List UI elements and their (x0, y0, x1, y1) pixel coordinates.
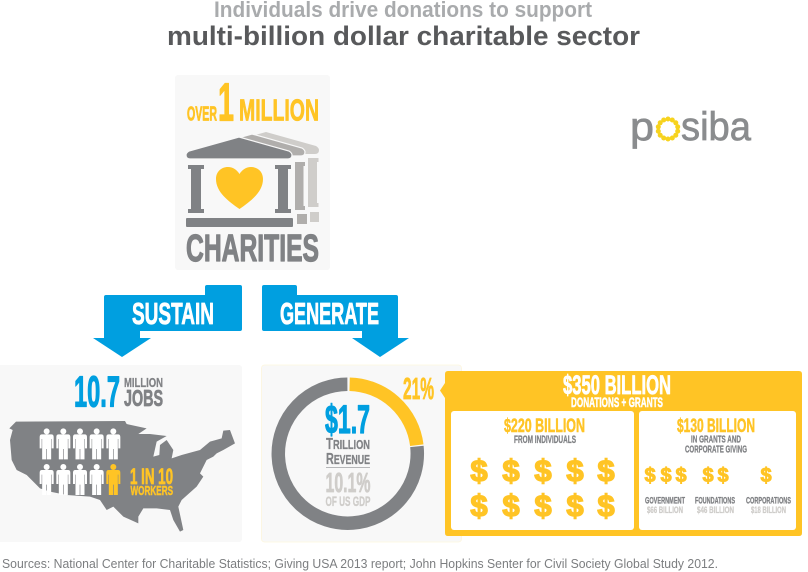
icon: ten dollar signs: $ (502, 453, 520, 488)
labels: giving sources: $66 BILLION (647, 505, 683, 515)
heading: over 1 million: OVER (187, 104, 217, 126)
icon: ten dollar signs: $ (566, 453, 584, 488)
card: from individuals: $220 BILLION (504, 416, 585, 437)
labels: giving sources: $18 BILLION (751, 505, 786, 515)
labels: giving sources (645, 496, 791, 515)
icon: ten dollar signs: $ (597, 453, 615, 488)
card: from individuals: FROM INDIVIDUALS (514, 434, 576, 446)
label: 10.1 percent of US GDP: 10.1% (326, 467, 371, 498)
heading: 10.7 million jobs: 10.7 (74, 368, 120, 416)
icon: small dollar signs: $ (702, 465, 714, 487)
card: grants and corporate giving: CORPORATE GIVING (685, 444, 747, 456)
icon: small dollar signs (644, 465, 772, 487)
icon: ten dollar signs: $ (470, 453, 488, 488)
card: grants and corporate giving: $130 BILLION (677, 416, 755, 437)
icon: small dollar signs: $ (675, 465, 687, 487)
panel: charities (175, 72, 330, 270)
icon: small dollar signs: $ (717, 465, 729, 487)
label: 1.7 trillion revenue: TRILLION (326, 436, 370, 453)
panel: jobs (0, 365, 242, 542)
label: 1.7 trillion revenue: REVENUE (326, 451, 370, 468)
arrow: generate: GENERATE (280, 297, 379, 331)
heading: over 1 million: 1 (218, 72, 234, 132)
arrow: sustain: SUSTAIN (132, 297, 214, 331)
icon: ten workers (40, 428, 120, 495)
icon: ten dollar signs: $ (597, 488, 615, 523)
panel: revenue (262, 365, 462, 542)
sources: Sources: National Center for Charitable Statistics; Giving USA 2013 report; John Hopkins Senter for Civil Society Global Study 2012. (2, 557, 718, 571)
icon: ten dollar signs: $ (534, 453, 552, 488)
panel: 350 billion donations and grants (440, 370, 802, 536)
icon: ten dollar signs: $ (470, 488, 488, 523)
label: 1 in 10 workers (130, 464, 173, 498)
card: grants and corporate giving (639, 411, 796, 530)
label: 10.1 percent of US GDP (326, 467, 371, 509)
heading: 10.7 million jobs: JOBS (124, 385, 163, 411)
heading: 350 billion: $350 BILLION (563, 370, 671, 400)
card: from individuals (451, 411, 634, 530)
arrow: sustain (93, 285, 242, 357)
title: multi-billion dollar charitable sector (167, 21, 641, 51)
label: 1 in 10 workers: 1 IN 10 (130, 464, 173, 489)
icon: ten dollar signs: $ (502, 488, 520, 523)
icon: ten dollar signs: $ (534, 488, 552, 523)
icon: small dollar signs: $ (760, 465, 772, 487)
labels: giving sources: GOVERNMENT (645, 496, 685, 506)
logo: posiba (630, 105, 752, 149)
icon: small dollar signs: $ (660, 465, 672, 487)
label: charities: CHARITIES (186, 228, 319, 270)
title (167, 0, 641, 51)
heading: over 1 million (187, 72, 319, 132)
text: 21% (403, 371, 434, 406)
icon: ten dollar signs: $ (566, 488, 584, 523)
label: 10.1 percent of US GDP: OF US GDP (326, 493, 370, 509)
heading: over 1 million: MILLION (239, 92, 319, 128)
labels: giving sources: $46 BILLION (697, 505, 734, 515)
icon: ten dollar signs (470, 453, 615, 523)
label: 1.7 trillion revenue (325, 398, 370, 468)
label: 1 in 10 workers: WORKERS (130, 483, 173, 498)
card: grants and corporate giving: IN GRANTS AND (691, 434, 741, 446)
icon: small dollar signs: $ (644, 465, 656, 487)
map: United States (9, 421, 235, 532)
heading: 10.7 million jobs: MILLION (124, 375, 163, 390)
icon: charity building with heart (186, 132, 319, 227)
heading: 350 billion: DONATIONS + GRANTS (571, 394, 663, 410)
label: 1.7 trillion revenue: $1.7 (325, 398, 370, 442)
labels: giving sources: FOUNDATIONS (695, 496, 735, 506)
heading: 350 billion (563, 370, 671, 410)
logo: posiba: p (630, 105, 654, 149)
logo: posiba: siba (681, 105, 752, 149)
donut chart: 21 percent (278, 384, 417, 523)
arrow: generate (262, 285, 409, 357)
